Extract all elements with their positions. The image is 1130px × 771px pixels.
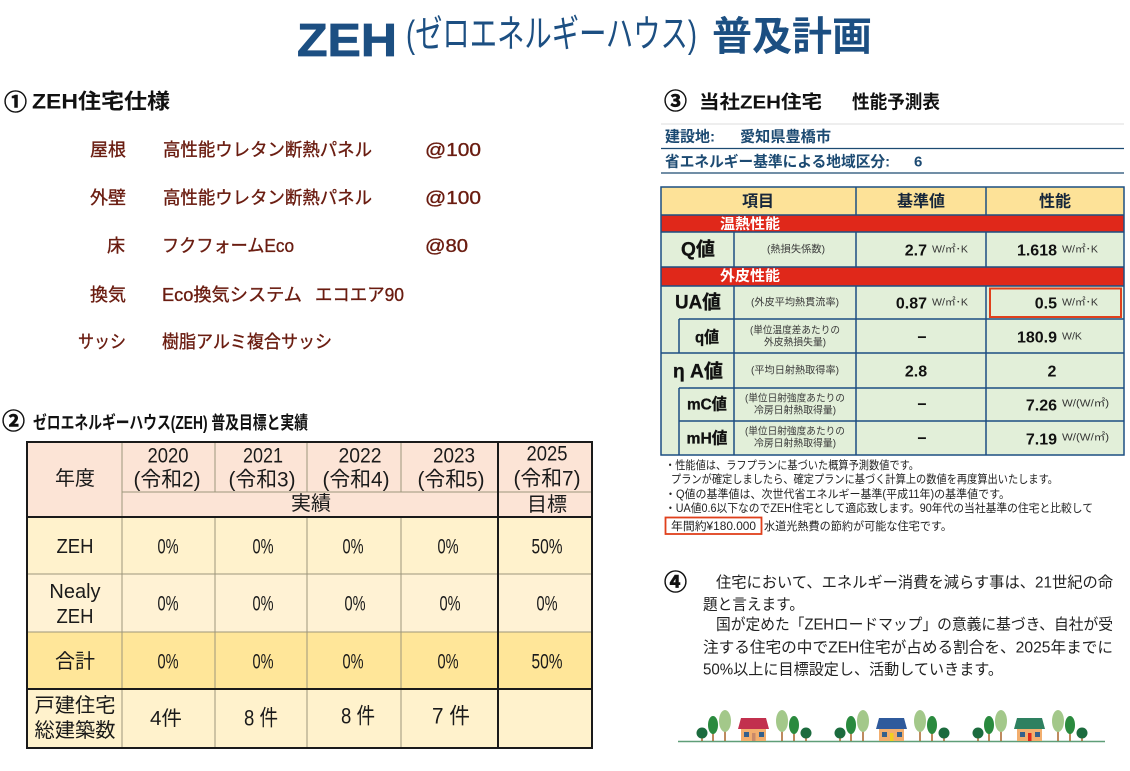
row: roof [90, 140, 481, 160]
house counts: 8 件 [341, 704, 375, 728]
row: UA value [675, 288, 1121, 317]
text block: commentary: 住宅において、エネルギー消費を減らす事は、21世紀の命 [716, 574, 1113, 592]
percentages: 0% [438, 650, 458, 674]
row: eta A value [673, 360, 1057, 382]
row: floor [107, 236, 468, 256]
column headers: 項目 [742, 194, 774, 210]
row labels: 戸建住宅 [34, 694, 116, 717]
site info [661, 124, 1124, 173]
row: eta A value: 2.8 [905, 364, 927, 380]
table: ZEH results by year [27, 442, 592, 748]
percentages: 0% [536, 592, 558, 616]
scene: red-roof house [696, 710, 812, 741]
percentages: 50% [532, 536, 562, 558]
row: eta A value: η A値 [673, 360, 723, 382]
notes: プランが確定しましたら、確定プランに基づく計算上の数値を再度算出いたします。 [671, 472, 1058, 486]
callout: annual savings [666, 518, 762, 534]
heading: section 3: 当社ZEH住宅 [699, 92, 822, 112]
title: 普及計画 [712, 15, 872, 59]
notes: ・性能値は、ラフプランに基づいた概算予測数値です。 [665, 458, 919, 472]
title: (ゼロエネルギーハウス) [406, 14, 697, 56]
row: UA value: 0.87 [896, 296, 927, 312]
text block: commentary: 50%以上に目標設定し、活動していきます。 [703, 660, 1003, 678]
text block: commentary [703, 574, 1113, 678]
percentages: 0% [252, 536, 274, 558]
row: mC value: mC値 [687, 394, 727, 414]
row: q value: (単位温度差あたりの [750, 324, 840, 336]
percentages: 50% [532, 650, 562, 674]
row: UA value: W/㎡･K [1062, 296, 1098, 308]
column headers: 性能 [1039, 192, 1071, 210]
house counts: 7 件 [432, 704, 470, 728]
text block: commentary: 国が定めた「ZEHロードマップ」の意義に基づき、自社が受 [716, 616, 1113, 634]
marker: section 4: ④ [664, 569, 687, 595]
heading: section 3: ③ [664, 88, 687, 114]
row labels: Nealy [49, 581, 101, 603]
percentages: 0% [252, 650, 274, 674]
table: performance values [661, 187, 1124, 455]
row: mH value: 冷房日射熱取得量) [754, 436, 836, 450]
row: mH value: 7.19 [1026, 432, 1057, 448]
row: mC value: 冷房日射熱取得量) [754, 404, 836, 416]
section bars: 温熱性能 [720, 215, 781, 233]
heading: section 3: 性能予測表 [852, 92, 940, 112]
row: mC value: W/(W/㎡) [1062, 398, 1109, 410]
row: UA value: UA値 [675, 292, 721, 314]
title: ZEH [297, 14, 397, 66]
header labels: (令和3) [228, 468, 296, 492]
header labels: 2020 [148, 444, 188, 468]
notes: 水道光熱費の節約が可能な住宅です。 [764, 519, 952, 533]
row: Q value: (熱損失係数) [767, 242, 825, 256]
row: Q value: 2.7 [905, 242, 927, 260]
row: sash: サッシ [78, 332, 126, 352]
heading: section 2 [2, 408, 308, 434]
header labels: 2023 [433, 444, 475, 468]
heading: section 1: ZEH住宅仕様 [32, 90, 170, 114]
heading: section 2: ② [2, 408, 25, 434]
callout: annual savings: 年間約¥180.000 [671, 519, 756, 533]
row: q value [695, 324, 1082, 348]
section bars: 外皮性能 [720, 267, 781, 285]
heading: section 1 [4, 89, 170, 115]
panel: performance forecast [661, 88, 1124, 534]
notes: ・UA値0.6以下なのでZEH住宅として適応致します。90年代の当社基準の住宅と比較して [665, 501, 1093, 515]
row: sash [78, 332, 332, 352]
row: wall: @100 [425, 188, 481, 208]
percentages: 0% [342, 650, 364, 674]
row: q value: − [917, 330, 927, 346]
row labels: 合計 [55, 650, 95, 673]
site info: 建設地: [665, 128, 715, 146]
row: q value: q値 [695, 328, 719, 346]
row: q value: W/K [1062, 332, 1082, 342]
scene: blue-roof house [834, 710, 950, 741]
panel: ZEH housing specification [4, 89, 481, 352]
row labels [34, 536, 116, 742]
row: UA value: (外皮平均熱貫流率) [751, 296, 839, 308]
header labels: (令和2) [134, 468, 200, 492]
row: roof: 屋根 [90, 140, 126, 160]
row: q value: 180.9 [1017, 330, 1057, 346]
title [297, 14, 872, 66]
row: mH value: − [917, 430, 927, 448]
row: eta A value: 2 [1048, 364, 1057, 380]
row: q value: 外皮熱損失量) [764, 336, 826, 348]
row: wall [90, 188, 481, 208]
column headers [742, 192, 1071, 210]
header labels: 2022 [338, 444, 382, 468]
header labels: 2025 [526, 442, 568, 466]
row: Q value: Q値 [681, 238, 715, 260]
row: floor: 床 [107, 236, 125, 256]
heading: section 1: ① [4, 89, 27, 115]
row: ventilation [90, 285, 404, 305]
text block: commentary: 題と言えます。 [703, 596, 804, 614]
percentages: 0% [158, 592, 178, 616]
site info: 愛知県豊橋市 [740, 128, 831, 146]
panel: commentary [664, 569, 1113, 678]
section bars [720, 215, 781, 285]
notes: ・Q値の基準値は、次世代省エネルギー基準(平成11年)の基準値です。 [665, 487, 1010, 501]
site info: 6 [914, 154, 922, 170]
row: Q value: W/㎡･K [1062, 244, 1098, 256]
row labels: 総建築数 [34, 719, 116, 742]
house counts: 4件 [150, 707, 182, 730]
row: mC value: 7.26 [1026, 398, 1057, 414]
row: mC value [687, 392, 1109, 416]
percentages [158, 536, 562, 674]
row: UA value: W/㎡･K [932, 296, 968, 308]
row: roof: @100 [425, 140, 481, 160]
site info: 省エネルギー基準による地域区分: [665, 152, 890, 170]
row: mC value: (単位日射強度あたりの [745, 392, 845, 404]
header labels: 2021 [243, 444, 283, 468]
house counts [150, 704, 470, 730]
row: UA value: 0.5 [1035, 296, 1057, 312]
row: mH value [686, 424, 1109, 450]
percentages: 0% [158, 650, 178, 674]
heading: section 2: ゼロエネルギーハウス(ZEH) 普及目標と実績 [33, 412, 308, 433]
row: Q value: W/㎡･K [932, 244, 968, 256]
row: ventilation: Eco換気システム [162, 285, 302, 305]
row: mC value: − [917, 396, 927, 414]
notes [665, 458, 1093, 534]
header labels: (令和4) [322, 468, 390, 492]
row: mH value: (単位日射強度あたりの [745, 424, 845, 438]
header labels: (令和7) [514, 468, 580, 490]
row: ventilation: エコエア90 [315, 285, 404, 305]
row labels: ZEH [56, 606, 94, 628]
text block: commentary: 注する住宅の中でZEH住宅が占める割合を、2025年までに [703, 638, 1113, 656]
heading: section 3 [664, 88, 940, 114]
row: wall: 外壁 [90, 188, 126, 208]
scene: green-roof house [972, 710, 1088, 741]
row: eta A value: (平均日射熱取得率) [751, 364, 839, 376]
header labels: (令和5) [418, 468, 484, 492]
header labels: 目標 [527, 493, 567, 516]
panel: ZEH targets and results [2, 408, 592, 748]
house counts: 8 件 [244, 706, 278, 730]
row: Q value: 1.618 [1017, 242, 1057, 260]
row: wall: 高性能ウレタン断熱パネル [163, 188, 372, 208]
row: Q value [681, 238, 1098, 260]
row: mH value: W/(W/㎡) [1062, 432, 1109, 444]
percentages: 0% [342, 536, 364, 558]
percentages: 0% [252, 592, 274, 616]
row: floor: @80 [425, 236, 468, 256]
header labels: 実績 [291, 492, 331, 515]
column headers: 基準値 [897, 192, 945, 210]
row: sash: 樹脂アルミ複合サッシ [162, 332, 332, 352]
row: roof: 高性能ウレタン断熱パネル [163, 140, 372, 160]
illustration: houses and trees [678, 710, 1105, 742]
percentages: 0% [438, 536, 458, 558]
row: ventilation: 換気 [90, 285, 126, 305]
header labels [55, 442, 580, 516]
percentages: 0% [344, 592, 366, 616]
row: mH value: mH値 [686, 428, 728, 448]
header labels: 年度 [55, 467, 95, 490]
percentages: 0% [158, 536, 178, 558]
percentages: 0% [440, 592, 460, 616]
row: floor: フクフォームEco [162, 236, 294, 256]
row labels: ZEH [56, 536, 94, 558]
